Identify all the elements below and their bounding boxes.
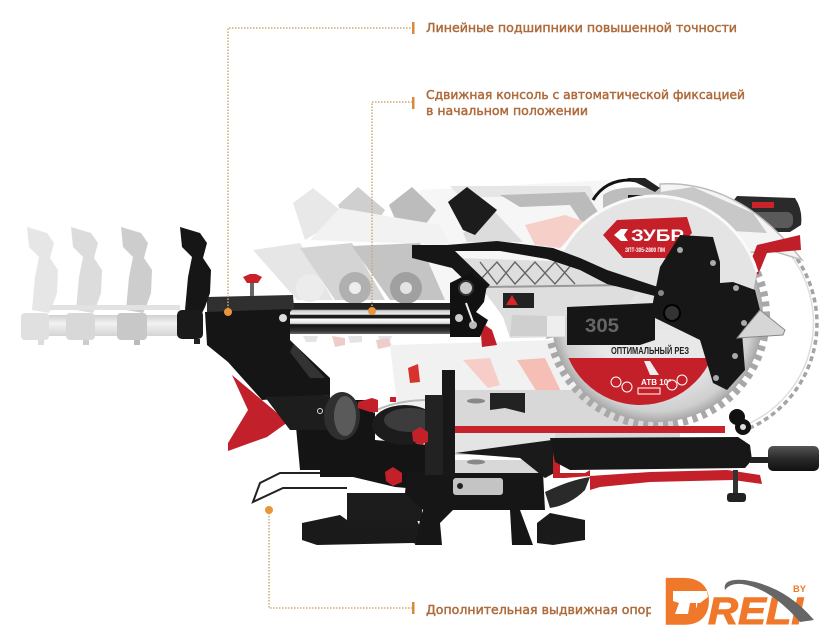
blade fence plate bbox=[737, 310, 785, 338]
rotary table bowl bbox=[372, 400, 438, 445]
red fold-out bracket under table bbox=[553, 453, 762, 490]
red table strip bbox=[455, 426, 725, 433]
logo: Dreli.by: D bbox=[662, 564, 711, 638]
wire extension support bbox=[253, 473, 347, 502]
main rear handle bbox=[177, 227, 211, 344]
sliding body bbox=[455, 258, 640, 338]
lattice bbox=[463, 262, 575, 284]
transparent blade guard bbox=[660, 184, 802, 260]
ghost positions of the saw head bbox=[253, 180, 640, 349]
outer blade position bbox=[700, 245, 820, 430]
logo: Dreli.by bbox=[662, 564, 814, 638]
label: linear bearings: Линейные подшипники повышенной точности bbox=[426, 20, 737, 35]
red lock knob bbox=[243, 274, 262, 296]
callout: extra support leader bbox=[265, 506, 414, 614]
end carriage block bbox=[205, 295, 330, 400]
front handle bbox=[750, 446, 819, 471]
pivot joint bbox=[450, 273, 497, 347]
table bbox=[452, 390, 680, 478]
dust port bbox=[448, 187, 523, 242]
base bbox=[302, 473, 590, 545]
lock levers bbox=[729, 409, 751, 435]
motor and cable bbox=[593, 178, 662, 220]
main saw blade bbox=[546, 254, 770, 426]
ghost blades behind the head bbox=[390, 340, 600, 430]
ghost positions of the rails bbox=[21, 305, 180, 345]
blade caption: ОПТИМАЛЬНЫЙ РЕЗ bbox=[611, 344, 689, 357]
upper guard bbox=[560, 196, 757, 330]
fence bbox=[425, 370, 455, 477]
logo panel on guard bbox=[603, 217, 692, 258]
rear handle unit bbox=[730, 196, 801, 232]
red blade label: АТВ 10° bbox=[641, 378, 671, 387]
pivot drum bbox=[265, 392, 430, 490]
icon: drill in logo bbox=[673, 591, 708, 614]
label: sliding console: Сдвижная консоль с автоматической фиксацией bbox=[426, 87, 745, 102]
logo: Dreli.by: RELI bbox=[708, 591, 805, 633]
label: sliding console: в начальном положении bbox=[426, 103, 588, 118]
red knobs bbox=[358, 397, 428, 486]
black top arm bbox=[412, 241, 667, 298]
logo panel on guard: ЗУБР bbox=[631, 226, 684, 245]
callout: sliding console leader bbox=[368, 97, 414, 315]
icon: arrow mark bbox=[614, 229, 628, 241]
label: extra support: Дополнительная выдвижная опора bbox=[426, 602, 661, 617]
red rear stabiliser fin bbox=[228, 375, 288, 451]
red bracket bbox=[750, 235, 801, 275]
red blade label bbox=[568, 358, 708, 405]
black panel with 305: 305 bbox=[585, 316, 619, 337]
ghost positions of the rear handle bbox=[27, 227, 152, 313]
black panel with 305 bbox=[567, 303, 655, 345]
black table extension bbox=[550, 437, 752, 470]
guide rails bbox=[288, 303, 452, 334]
black blade cover bbox=[653, 235, 760, 390]
logo: Dreli.by: BY bbox=[793, 584, 806, 594]
label: sliding console bbox=[426, 87, 745, 118]
callout: linear bearings leader bbox=[224, 22, 414, 316]
logo panel on guard: ЗПТ-305-2800 ПМ bbox=[625, 248, 665, 254]
levelling foot bbox=[727, 470, 746, 502]
